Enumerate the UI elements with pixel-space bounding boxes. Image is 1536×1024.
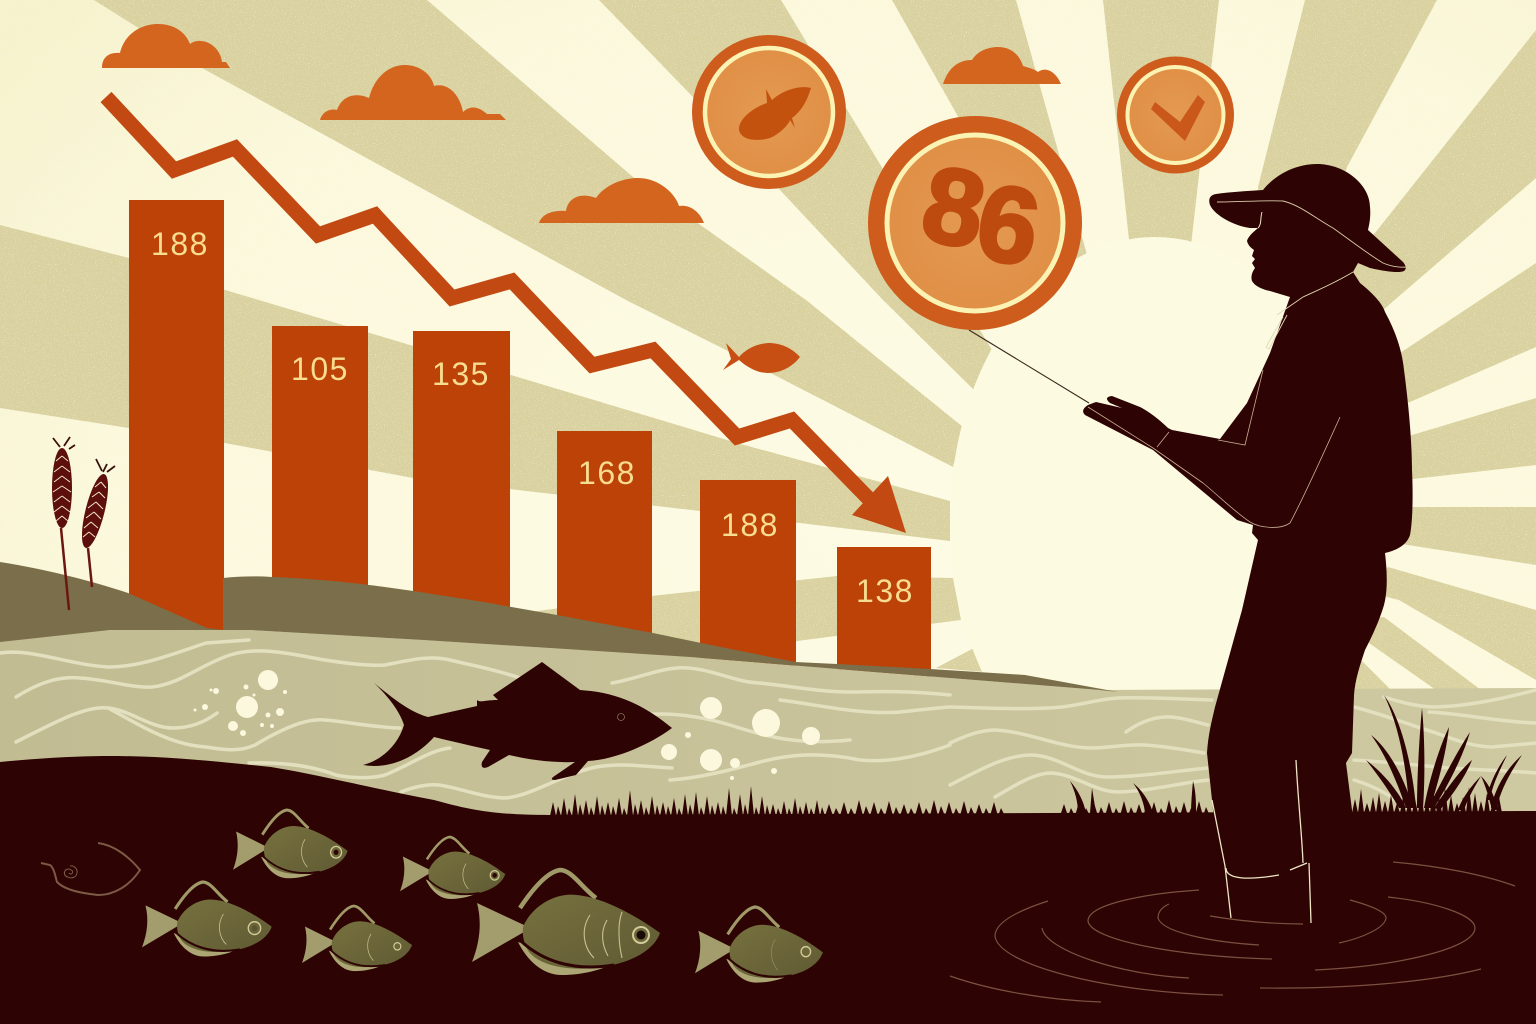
wader and boot lines — [1212, 760, 1311, 923]
bar 138: 138 — [856, 573, 914, 609]
cloud 2 — [320, 65, 506, 120]
wheat 1 — [52, 437, 75, 610]
grass right of fisherman — [1352, 787, 1536, 813]
bar 188: 188 — [151, 226, 209, 262]
fish F — [695, 907, 823, 983]
falling trend arrow — [106, 97, 906, 533]
bar 188 second — [700, 480, 796, 670]
bubbles left of fish — [194, 670, 287, 736]
medallion: fish icon — [692, 35, 846, 189]
medallion: number 86: 86 — [898, 134, 1061, 296]
river — [0, 630, 1536, 830]
fisherman silhouette — [1083, 164, 1413, 930]
fish B — [400, 837, 505, 899]
bar 105 — [272, 326, 368, 591]
bar 135 — [413, 331, 510, 616]
clouds — [102, 24, 1061, 223]
ripples — [950, 862, 1515, 1002]
fish A — [233, 810, 348, 878]
small orange fish — [723, 343, 800, 373]
ghost fish outline — [41, 843, 140, 895]
bar 188 — [129, 200, 224, 630]
large dark fish — [363, 662, 672, 780]
fishing line — [969, 330, 1089, 403]
water wave lines — [0, 640, 1536, 800]
fish E large — [472, 870, 660, 975]
face highlight — [1258, 212, 1262, 228]
fish C — [142, 882, 272, 957]
bar 138 — [837, 547, 931, 677]
bar 168 — [557, 431, 652, 641]
school of fish — [142, 810, 823, 983]
bar 188 second: 188 — [721, 507, 779, 543]
sun disc — [950, 237, 1360, 803]
dark foreground ground — [0, 756, 1536, 1024]
reeds — [1366, 695, 1522, 810]
bar chart — [129, 200, 931, 677]
grass between shore and fisherman — [1060, 800, 1240, 816]
medallion: number 86 — [868, 116, 1082, 330]
tall grass blades near shore — [1070, 781, 1196, 813]
fish D — [302, 906, 412, 971]
wheat 2 — [77, 459, 115, 587]
bar 105: 105 — [291, 351, 349, 387]
sunburst rays — [0, 0, 1536, 690]
medallion: check mark — [1117, 56, 1234, 174]
paper grain on sky — [0, 0, 1536, 700]
cloud 4 — [943, 47, 1061, 84]
second hill — [223, 576, 1118, 692]
collar and cord — [1266, 272, 1353, 349]
bubbles right of fish — [661, 697, 820, 780]
bar 135: 135 — [432, 356, 490, 392]
hat brim line — [1217, 201, 1406, 267]
shoreline grass — [550, 786, 1240, 816]
left hill — [0, 562, 223, 642]
cloud 3 — [539, 178, 704, 223]
bar 168: 168 — [578, 455, 636, 491]
cloud 1 — [102, 24, 230, 68]
jacket and sleeve lines — [1088, 370, 1340, 527]
wheat stalks — [52, 437, 115, 610]
